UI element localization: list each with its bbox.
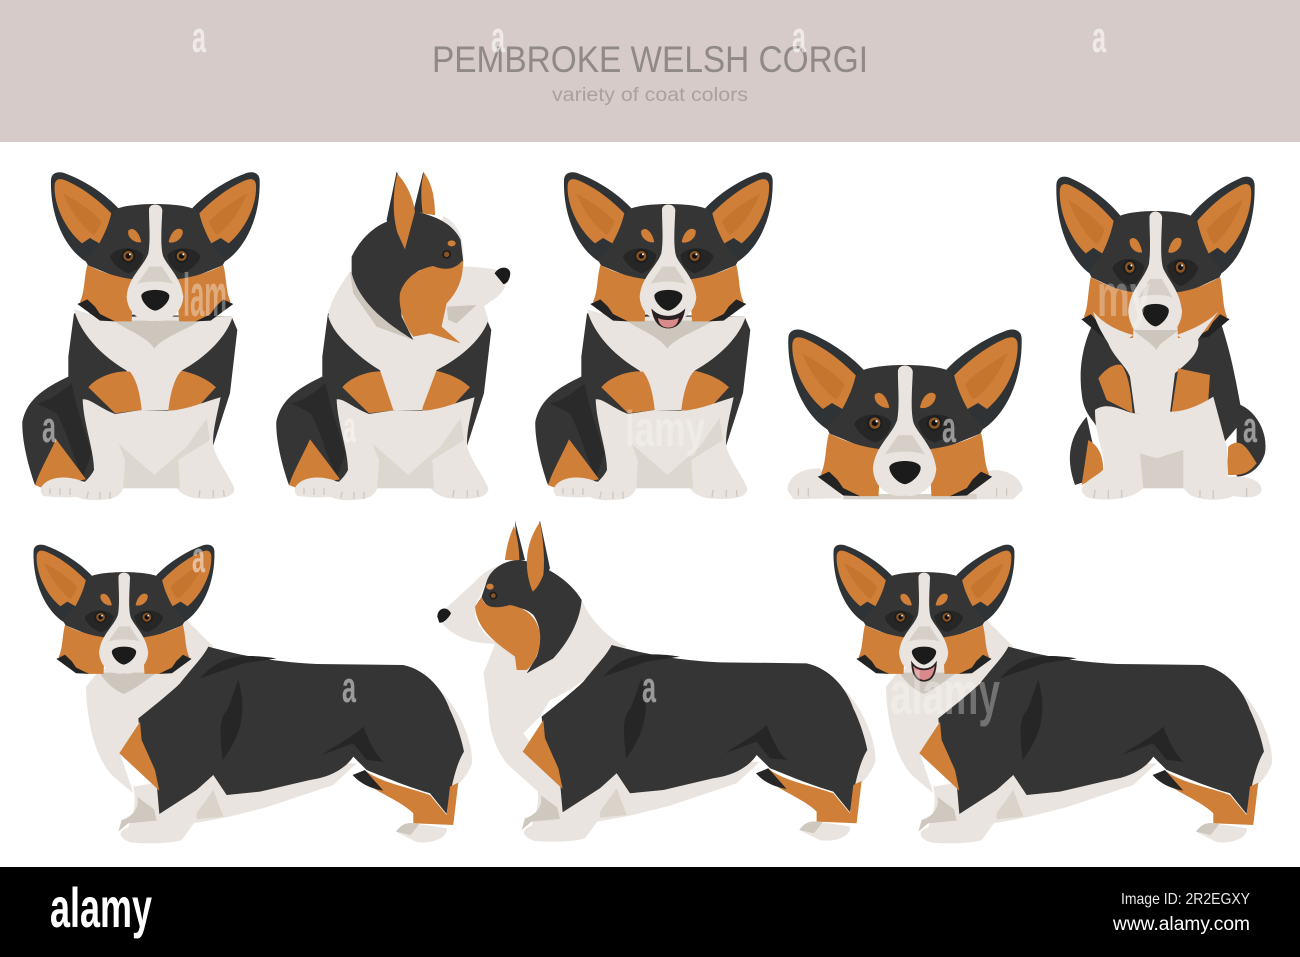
corgi 2: sitting side	[276, 172, 510, 500]
watermarks	[42, 13, 1257, 727]
corgi 5 head	[1056, 177, 1255, 338]
watermarks: lam	[183, 262, 227, 329]
watermarks: a	[42, 403, 56, 452]
watermarks: my	[1097, 262, 1150, 329]
watermarks: a	[1092, 13, 1106, 62]
watermarks: a	[642, 663, 656, 712]
title: PEMBROKE WELSH CORGI	[432, 39, 868, 80]
corgi 5: sitting front puppy	[1070, 307, 1266, 500]
corgi 6 head	[33, 545, 214, 674]
watermarks: a	[491, 13, 505, 62]
watermarks: a	[192, 533, 205, 582]
corgi 4: lying paws	[787, 468, 1023, 499]
corgi 8 tongue	[912, 663, 936, 681]
footer bar	[0, 867, 1300, 957]
watermarks: a	[792, 13, 806, 62]
corgi 6: standing, facing viewer	[86, 620, 472, 843]
header band	[0, 0, 1300, 142]
corgi 1: sitting front	[22, 172, 260, 500]
corgi 3: sitting front smiling	[535, 172, 773, 500]
watermarks: lamy	[625, 401, 705, 457]
image id: Image ID: 2R2EGXY	[1121, 891, 1250, 908]
website: www.alamy.com	[1112, 914, 1250, 935]
corgi 5 collar	[1093, 312, 1218, 350]
corgi 8 head	[833, 545, 1014, 681]
watermarks: a	[942, 403, 956, 452]
watermarks: a	[343, 403, 356, 452]
watermarks: a	[192, 13, 206, 62]
corgi 8: standing, smiling	[886, 620, 1272, 843]
corgi 4 head	[788, 330, 1022, 496]
watermarks: alamy	[890, 660, 1000, 727]
corgi 7: standing, side profile	[437, 521, 875, 842]
alamy logo: alamy	[50, 876, 152, 939]
watermarks: a	[1243, 403, 1257, 452]
subtitle: variety of coat colors	[552, 85, 748, 106]
tongue and mouth	[651, 308, 685, 328]
watermarks: a	[342, 663, 356, 712]
